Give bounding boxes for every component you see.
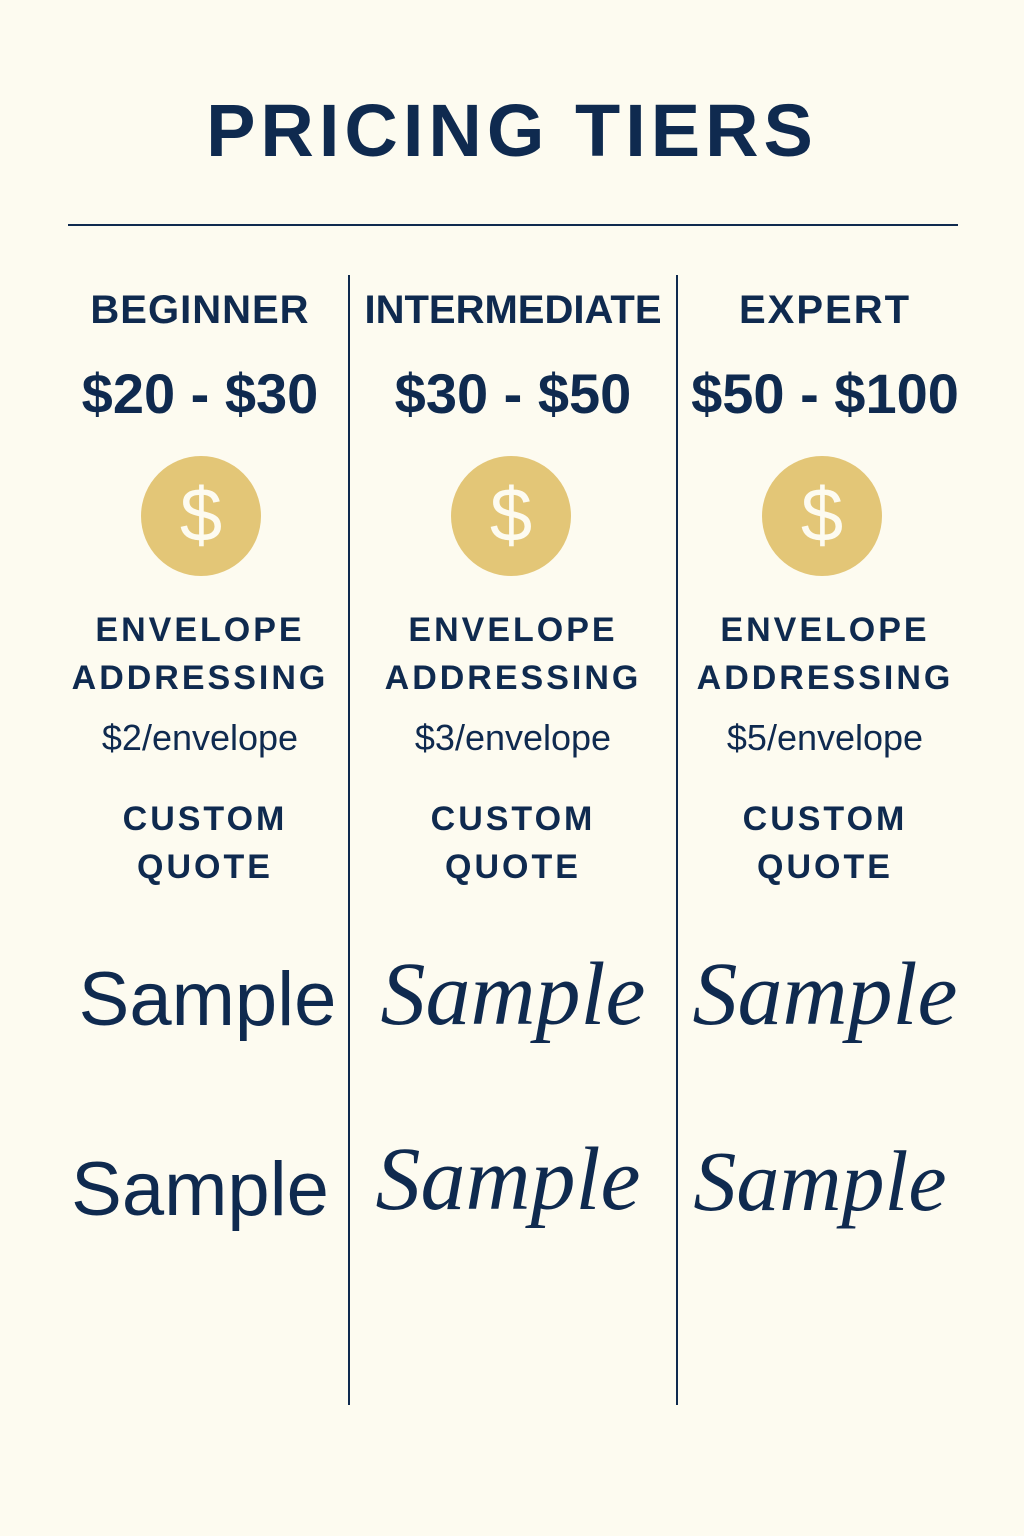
price: $30 - $50 (395, 362, 631, 425)
custom quote: CUSTOM (123, 800, 287, 838)
title: PRICING TIERS (206, 89, 818, 172)
sample script 1: Sample (693, 945, 957, 1044)
envelope addressing: ENVELOPE (720, 611, 930, 649)
icon: coin: $ (490, 473, 532, 558)
sample 1: Sample (79, 957, 336, 1042)
envelope addressing (385, 611, 641, 697)
envelope addressing: ADDRESSING (697, 659, 953, 697)
sample 2: Sample (71, 1147, 329, 1232)
custom quote: QUOTE (445, 848, 581, 886)
custom quote (743, 800, 907, 886)
price: $20 - $30 (82, 362, 318, 425)
custom quote: CUSTOM (431, 800, 595, 838)
panel: intermediate (364, 288, 662, 1229)
custom quote (431, 800, 595, 886)
envelope addressing (697, 611, 953, 697)
custom quote (123, 800, 287, 886)
envelope addressing: ADDRESSING (385, 659, 641, 697)
envelope price: $2/envelope (102, 717, 298, 758)
envelope addressing (72, 611, 328, 697)
tier name: INTERMEDIATE (364, 288, 662, 332)
icon: coin (451, 456, 571, 576)
sample script 2: Sample (376, 1130, 640, 1229)
envelope addressing: ADDRESSING (72, 659, 328, 697)
sample script 1: Sample (381, 945, 645, 1044)
envelope addressing: ENVELOPE (408, 611, 618, 649)
price: $50 - $100 (691, 362, 959, 425)
envelope addressing: ENVELOPE (95, 611, 305, 649)
envelope price: $3/envelope (415, 717, 611, 758)
tier name: EXPERT (739, 288, 911, 332)
icon: coin (141, 456, 261, 576)
custom quote: QUOTE (757, 848, 893, 886)
icon: coin (762, 456, 882, 576)
panel: expert (691, 288, 959, 1229)
sample script 2: Sample (693, 1133, 947, 1229)
icon: coin: $ (180, 473, 222, 558)
custom quote: QUOTE (137, 848, 273, 886)
tier name: BEGINNER (90, 288, 310, 332)
icon: coin: $ (801, 473, 843, 558)
envelope price: $5/envelope (727, 717, 923, 758)
custom quote: CUSTOM (743, 800, 907, 838)
panel: beginner (71, 288, 336, 1232)
